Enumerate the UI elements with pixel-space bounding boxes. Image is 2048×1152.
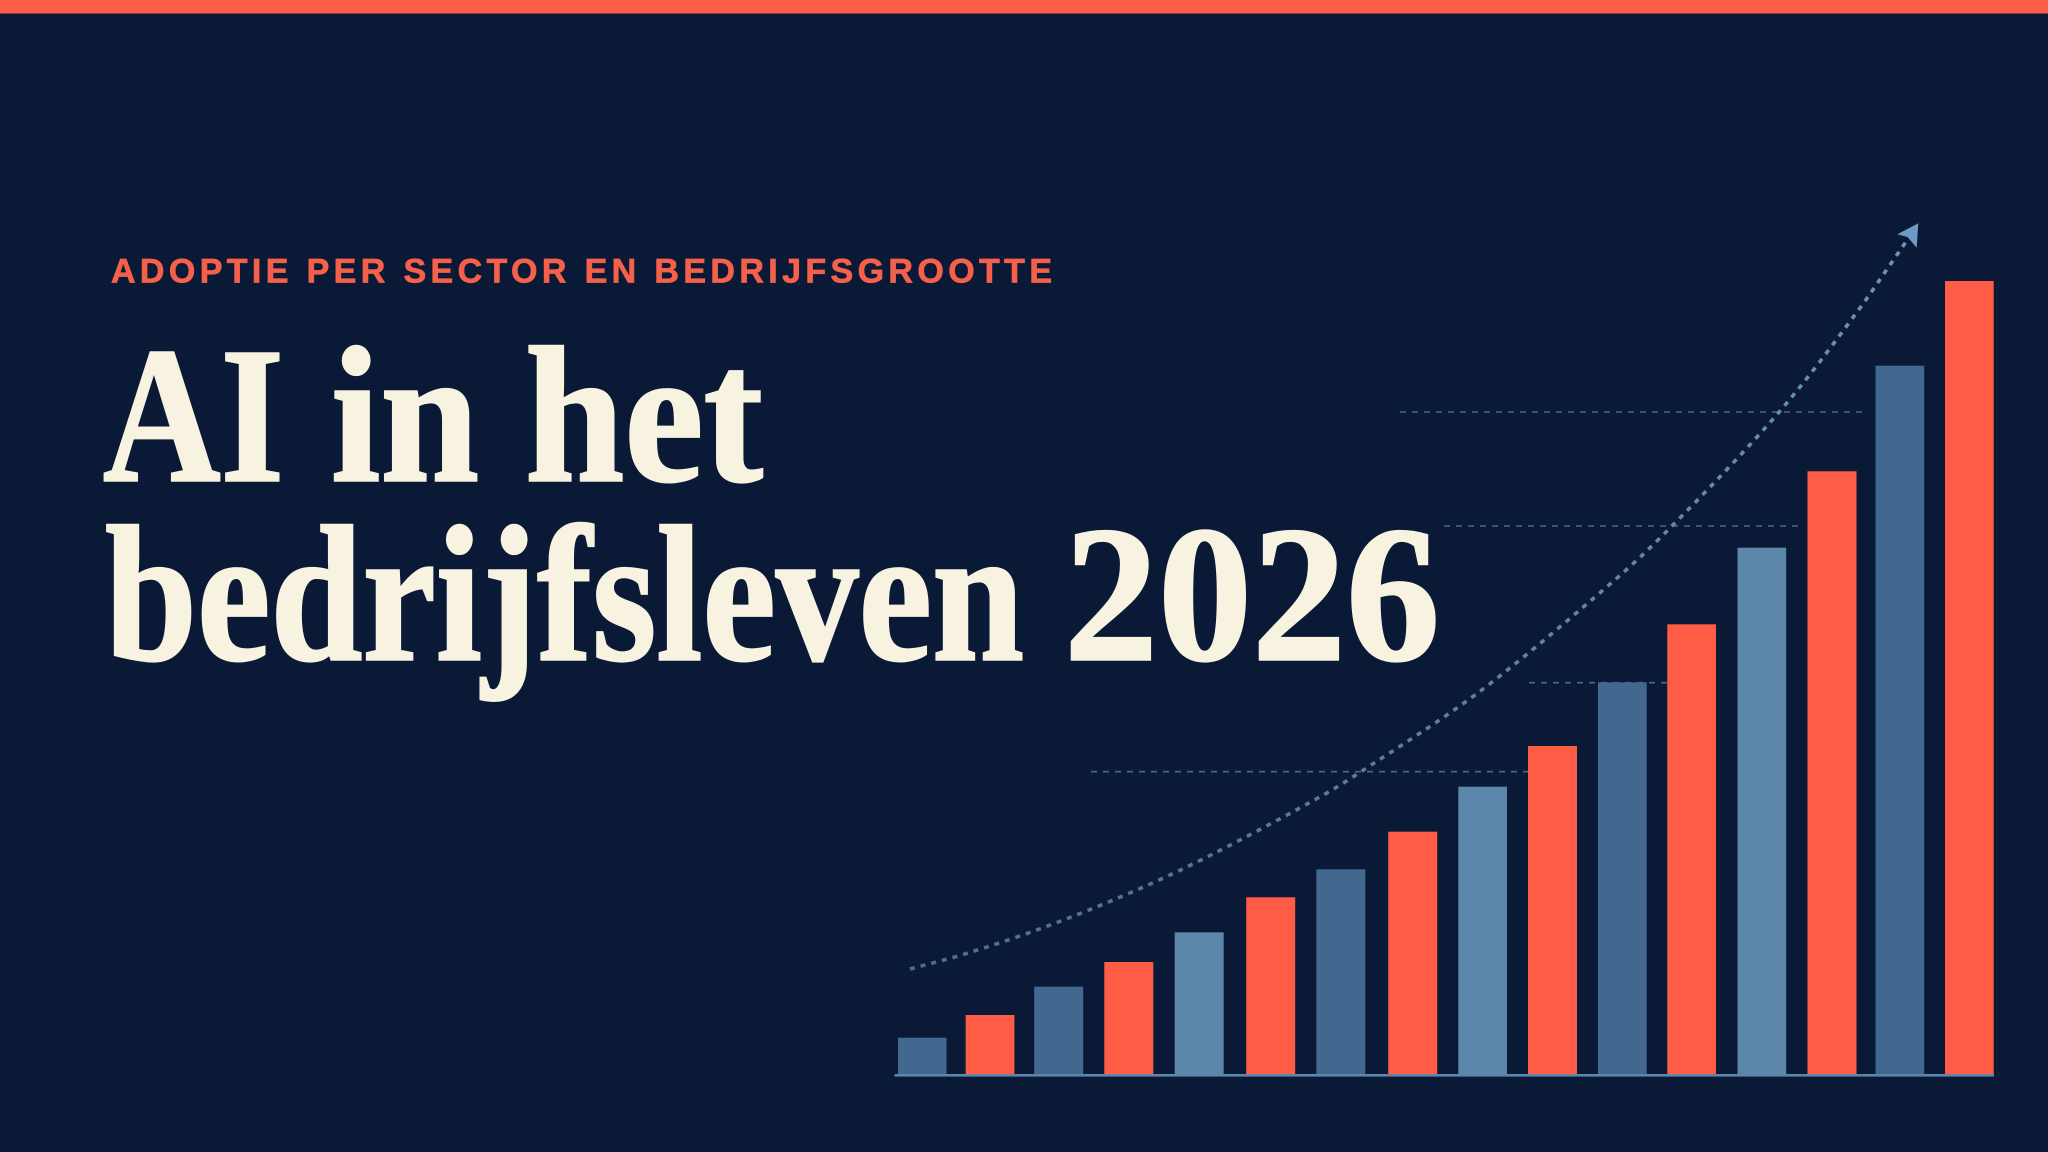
eyebrow: subtitle: ADOPTIE PER SECTOR EN BEDRIJFSGROOTTE (111, 252, 1052, 290)
top accent bar (0, 0, 2048, 14)
title line 2: bedrijfsleven (105, 486, 1024, 702)
chart: rising bars with trend arrow (894, 223, 1994, 1077)
dotted trend curve (910, 236, 1910, 969)
dashed reference lines (1091, 412, 1868, 772)
title line 1: in (331, 308, 479, 522)
axis baseline (894, 1074, 1994, 1077)
arrowhead (1897, 223, 1918, 248)
title line 2: 2026 (1064, 486, 1440, 702)
title (103, 308, 1440, 702)
bars (898, 281, 1994, 1074)
title line 1: AI (103, 308, 284, 522)
title line 1: het (525, 308, 763, 522)
